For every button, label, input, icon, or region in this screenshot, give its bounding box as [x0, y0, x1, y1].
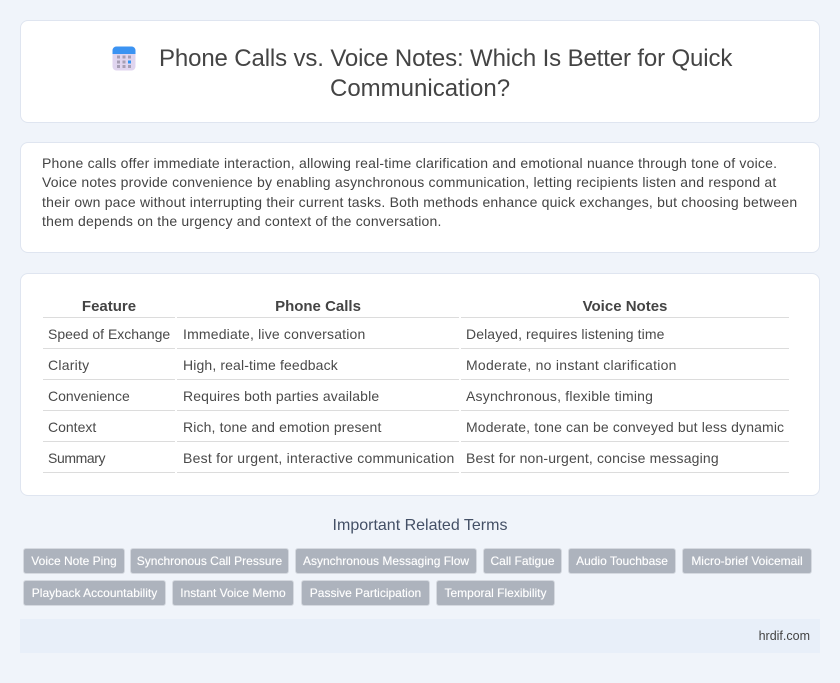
text block: introduction — [42, 155, 797, 229]
row: Convenience: Asynchronous, flexible timing — [466, 388, 653, 404]
row: Convenience: Convenience — [48, 388, 130, 404]
tag: Call Fatigue — [490, 554, 555, 568]
tag — [682, 548, 812, 574]
tag: Audio Touchbase — [576, 554, 668, 568]
row: Speed of Exchange: Immediate, live conversation — [183, 326, 365, 342]
icon: calendar — [112, 46, 136, 70]
row: Context — [48, 419, 784, 435]
text block: introduction: Phone calls offer immediate interaction, allowing real-time clarification and emotional nuance through tone of voice. — [42, 155, 777, 171]
tag — [301, 580, 430, 606]
footer: source: hrdif.com — [759, 629, 810, 643]
tag — [483, 548, 562, 574]
row: Summary: Best for urgent, interactive communication — [183, 450, 455, 466]
row: Summary — [48, 450, 719, 466]
tag — [172, 580, 294, 606]
panel: comparison table — [20, 273, 820, 496]
title: Phone Calls vs. Voice Notes: Which Is Better for Quick — [159, 45, 732, 72]
row: Speed of Exchange: Speed of Exchange — [48, 326, 170, 342]
tag: Instant Voice Memo — [180, 586, 286, 600]
tag — [568, 548, 676, 574]
table header: Voice Notes: Voice Notes — [583, 298, 667, 315]
row: Context: Context — [48, 419, 96, 435]
row: Context: Moderate, tone can be conveyed but less dynamic — [466, 419, 784, 435]
row: Summary: Best for non-urgent, concise messaging — [466, 450, 719, 466]
panel: title card — [20, 20, 820, 123]
row: Clarity — [48, 357, 677, 373]
row: Speed of Exchange: Delayed, requires listening time — [466, 326, 665, 342]
row: Convenience — [48, 388, 653, 404]
text block: introduction: their own pace without interrupting their current tasks. Both methods enhance quick exchanges, but choosing between — [42, 194, 797, 210]
table header: Phone Calls: Phone Calls — [275, 298, 361, 315]
text block: introduction: Voice notes provide convenience by enabling asynchronous communication, letting recipients listen and respond at — [42, 174, 777, 190]
heading: related terms: Important Related Terms — [333, 517, 507, 534]
tag — [130, 548, 289, 574]
footer bar — [20, 619, 820, 653]
title: Communication? — [330, 75, 510, 102]
row: Speed of Exchange — [48, 326, 665, 342]
tag — [23, 580, 166, 606]
tag — [436, 580, 555, 606]
tags: related terms — [23, 548, 812, 606]
title — [159, 45, 732, 102]
tag — [295, 548, 477, 574]
row: Clarity: Clarity — [48, 357, 89, 373]
tag — [23, 548, 125, 574]
tag: Micro-brief Voicemail — [691, 554, 803, 568]
row: Clarity: High, real-time feedback — [183, 357, 338, 373]
row: Summary: Summary — [48, 450, 105, 466]
tag: Asynchronous Messaging Flow — [303, 554, 469, 568]
tag: Synchronous Call Pressure — [137, 554, 282, 568]
row: Context: Rich, tone and emotion present — [183, 419, 381, 435]
table header: Feature: Feature — [82, 298, 136, 315]
row: Clarity: Moderate, no instant clarification — [466, 357, 677, 373]
text block: introduction: them depends on the urgency and context of the conversation. — [42, 213, 442, 229]
tag: Passive Participation — [310, 586, 421, 600]
tag: Playback Accountability — [32, 586, 157, 600]
tag: Temporal Flexibility — [444, 586, 547, 600]
row: Convenience: Requires both parties available — [183, 388, 379, 404]
tag: Voice Note Ping — [31, 554, 117, 568]
panel: introduction — [20, 142, 820, 253]
comparison table — [43, 298, 789, 473]
